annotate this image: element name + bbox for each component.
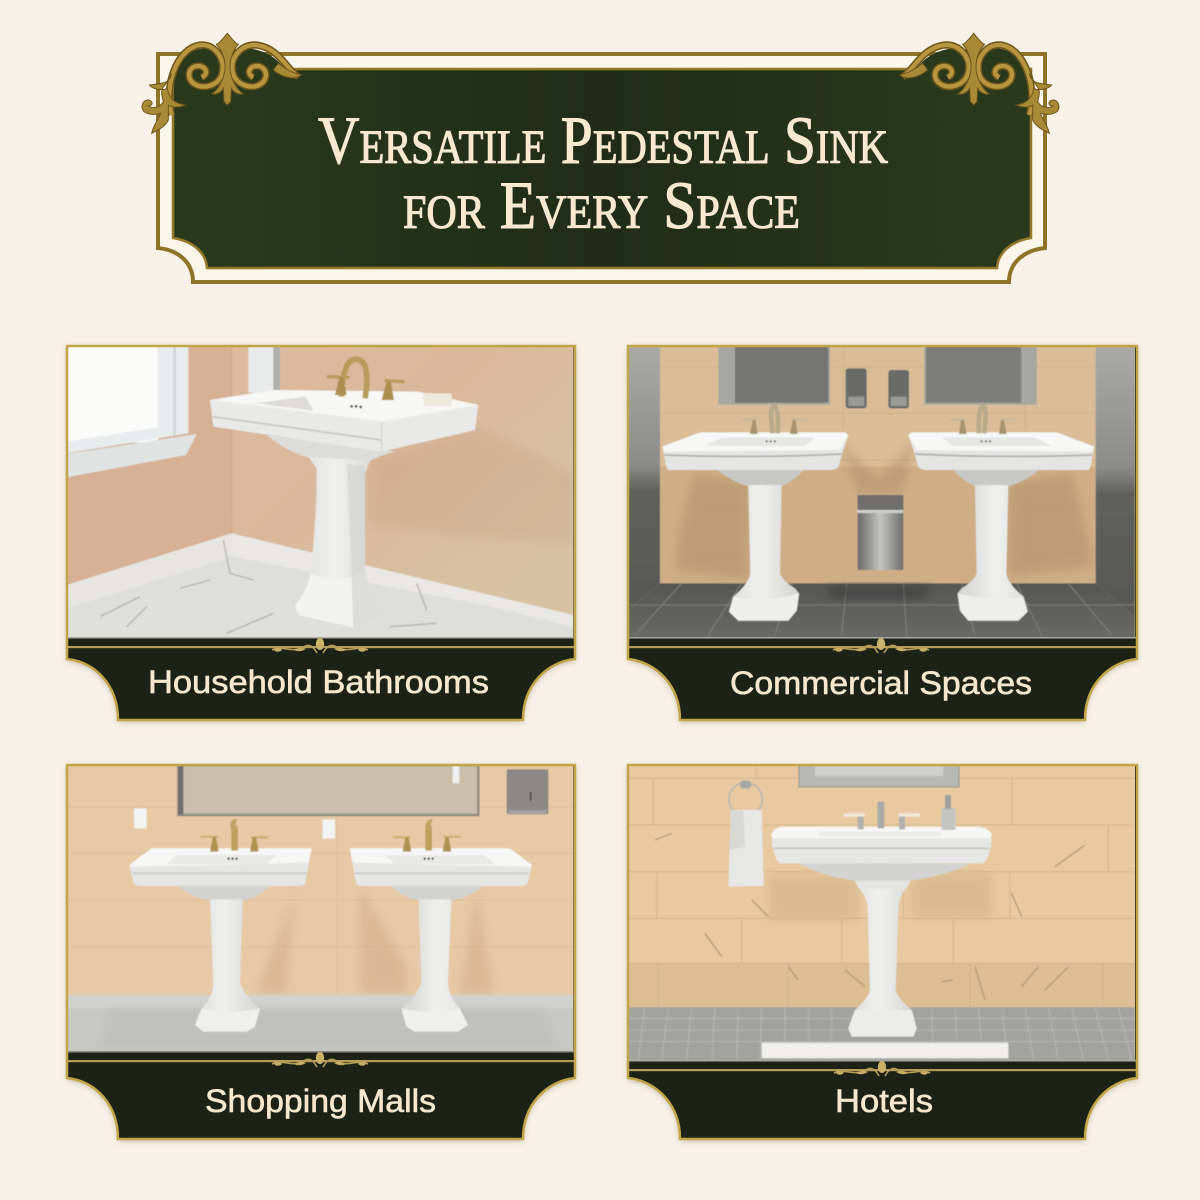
band divider [67, 1051, 575, 1067]
panel frame [628, 765, 1137, 1139]
title text: Versatile Pedestal Sink [318, 102, 888, 178]
label: hotels: Hotels [835, 1083, 933, 1119]
panel gold border [67, 765, 575, 1139]
ornament: right corner scrolls [899, 33, 1059, 133]
band divider [628, 637, 1137, 653]
label: commercial spaces: Commercial Spaces [730, 665, 1032, 701]
label: shopping malls: Shopping Malls [205, 1083, 436, 1119]
panel: household bathrooms [60, 340, 580, 720]
panel gold border [67, 346, 575, 720]
title text: for Every Space [403, 167, 800, 243]
panel: shopping malls [60, 760, 580, 1139]
panel gold border [628, 346, 1137, 720]
panel: hotels [625, 760, 1145, 1139]
photo: hotel bathroom sink [625, 760, 1145, 1061]
banner outer frame [158, 54, 1045, 282]
band divider [628, 1060, 1137, 1076]
band divider [67, 637, 575, 653]
photo: shopping mall restroom with two sinks [60, 760, 580, 1060]
panel frame [67, 346, 575, 720]
ornament: left corner scrolls [142, 33, 302, 133]
panel frame [628, 346, 1137, 720]
panel frame [67, 765, 575, 1139]
label: household bathrooms: Household Bathrooms [148, 664, 489, 700]
panel gold border [628, 765, 1137, 1139]
photo: commercial restroom with two sinks [625, 340, 1145, 640]
photo: household bathroom sink [60, 340, 580, 640]
title banner [142, 33, 1059, 282]
panel: commercial spaces [625, 340, 1145, 720]
title text [318, 102, 888, 243]
banner green panel [173, 69, 1031, 268]
